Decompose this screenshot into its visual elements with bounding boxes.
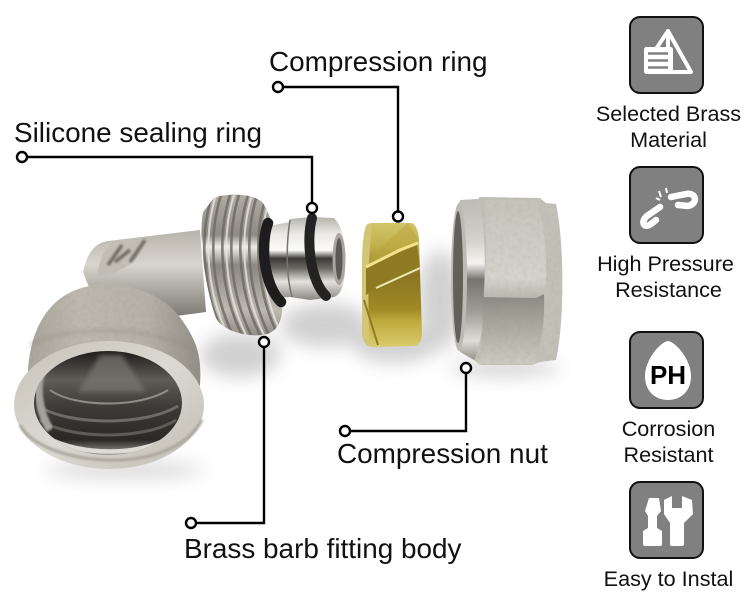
label: Brass barb fitting body: Brass barb fitting body xyxy=(184,533,462,564)
inner O-ring xyxy=(264,223,281,302)
label: Compression ring: Compression ring xyxy=(269,46,488,77)
label: Silicone sealing ring xyxy=(14,117,317,213)
threaded collar xyxy=(202,194,282,336)
feature: High Pressure Resistance xyxy=(597,167,734,302)
nut hex body xyxy=(474,197,562,365)
label: Compression nut xyxy=(337,363,548,469)
feature: High Pressure Resistance: Resistance xyxy=(615,277,722,302)
silicone O-ring xyxy=(309,218,326,296)
label: Brass barb fitting body xyxy=(184,337,462,564)
product photo: exploded elbow fitting xyxy=(14,190,562,477)
feature: Easy to Install xyxy=(604,482,733,591)
icon: broken chain link xyxy=(630,167,703,243)
label: Silicone sealing ring: Silicone sealing ring xyxy=(14,117,262,148)
threaded bore xyxy=(33,350,183,456)
feature: Corrosion Resistant xyxy=(622,332,715,467)
caption: Selected Brass xyxy=(596,101,741,126)
feature: Corrosion Resistant: Resistant xyxy=(623,442,714,467)
caption: Corrosion xyxy=(622,416,715,441)
caption: High Pressure xyxy=(597,251,734,276)
compression nut xyxy=(451,197,562,365)
icon: tools xyxy=(630,482,703,558)
label: Compression ring xyxy=(269,46,488,222)
upper hex face xyxy=(484,200,546,298)
icon: PH droplet: PH xyxy=(650,360,686,390)
label: Compression nut: Compression nut xyxy=(337,438,548,469)
feature: Selected Brass Material: Material xyxy=(630,127,707,152)
caption: Easy to Instal xyxy=(604,566,733,591)
lower hex face xyxy=(478,294,544,364)
elbow arm xyxy=(83,230,206,316)
elbow body xyxy=(14,230,206,469)
soft ground shadows xyxy=(45,250,560,477)
nut collar xyxy=(451,199,485,360)
flange xyxy=(14,341,204,469)
feature: Selected Brass Material xyxy=(596,17,741,152)
stem step line xyxy=(287,220,292,297)
stem end opening xyxy=(332,233,346,285)
icon: brass ingot and document xyxy=(630,17,703,93)
stem xyxy=(268,217,345,300)
cup xyxy=(28,284,200,410)
brass compression ring xyxy=(362,223,422,347)
